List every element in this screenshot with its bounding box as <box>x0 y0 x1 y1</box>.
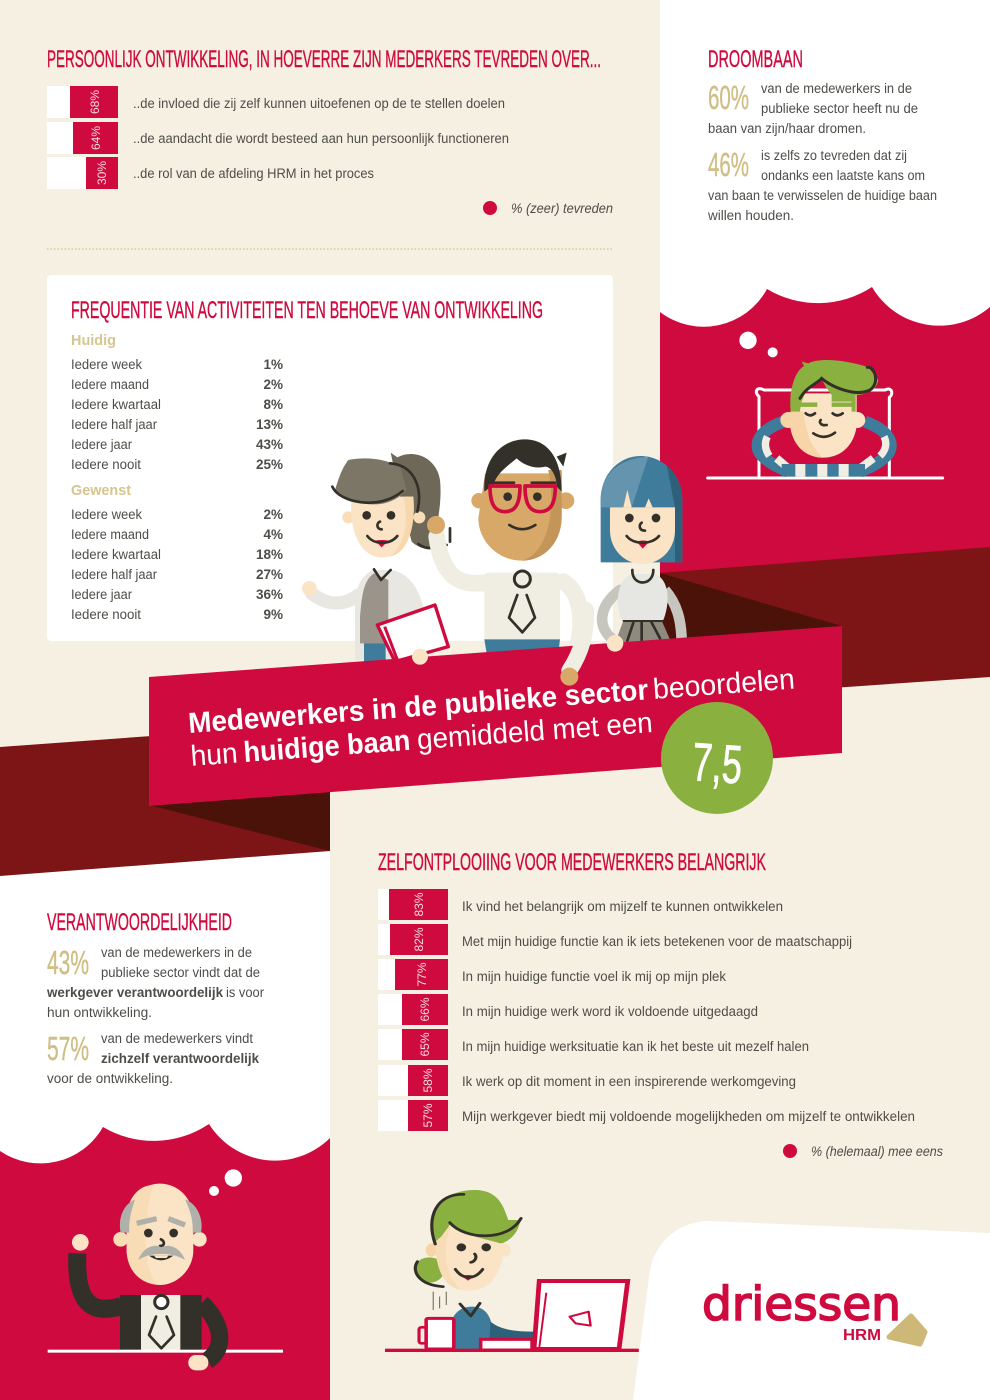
banner text: huidige baan <box>242 725 411 769</box>
panel: frequentie table <box>47 275 613 641</box>
stat: 43 percent: 43% <box>47 944 89 981</box>
legend label: % (helemaal) mee eens <box>811 1144 943 1159</box>
bar: 77 percent <box>378 959 448 990</box>
label: aandacht: ..de aandacht die wordt besteed aan hun persoonlijk functioneren <box>133 131 509 146</box>
label: invloed: ..de invloed die zij zelf kunnen uitoefenen op de te stellen doelen <box>133 96 505 111</box>
stat: 46 percent: 46% <box>708 146 749 183</box>
subheading: huidig: Huidig <box>71 332 116 349</box>
text block: verantwoordelijkheid 2: zichzelf verantwoordelijk <box>101 1051 259 1066</box>
bar: 68 percent <box>47 86 118 118</box>
text block: verantwoordelijkheid 2: van de medewerkers vindt <box>101 1031 253 1046</box>
table: huidig: Iedere jaar <box>71 437 132 452</box>
table: huidig: Iedere kwartaal <box>71 397 161 412</box>
table: huidig: Iedere nooit <box>71 457 141 472</box>
table: gewenst: Iedere jaar <box>71 587 132 602</box>
text block: droombaan 2: ondanks een laatste kans om <box>761 168 925 183</box>
table: huidig <box>71 357 283 472</box>
section: zelfontplooiing <box>378 849 943 1159</box>
text block: verantwoordelijkheid 1: werkgever verantwoordelijk <box>46 985 223 1000</box>
illustration: dreaming man <box>708 332 943 478</box>
bar: 66 percent: 66% <box>418 997 432 1022</box>
text block: droombaan 1: baan van zijn/haar dromen. <box>708 121 866 136</box>
bar: 58 percent <box>378 1065 448 1096</box>
subheading: gewenst: Gewenst <box>71 482 131 499</box>
bar: 30 percent: 30% <box>95 161 109 185</box>
text block: verantwoordelijkheid 2 <box>47 1031 259 1086</box>
logo: driessen HRM: driessen <box>702 1277 901 1331</box>
table: gewenst <box>71 507 283 622</box>
table: gewenst: Iedere nooit <box>71 607 141 622</box>
heading: droombaan: DROOMBAAN <box>708 46 803 73</box>
illustration: older man with moustache <box>48 1169 283 1370</box>
text block: droombaan 2: is zelfs zo tevreden dat zij <box>761 148 907 163</box>
section: persoonlijk ontwikkeling <box>47 46 613 216</box>
panel: verantwoordelijkheid background <box>0 851 330 1400</box>
labels: zelfontplooiing statements: In mijn huidige functie voel ik mij op mijn plek <box>462 969 726 984</box>
character: man with red glasses <box>427 439 581 670</box>
legend label: % (zeer) tevreden <box>511 201 613 216</box>
labels: zelfontplooiing statements <box>462 899 915 1124</box>
body and suit <box>48 1234 283 1370</box>
bar: 65 percent <box>378 1029 448 1060</box>
table: huidig: 43% <box>256 437 283 452</box>
section: verantwoordelijkheid <box>46 909 264 1086</box>
bar: 66 percent <box>378 994 448 1025</box>
table: gewenst: 36% <box>256 587 283 602</box>
table: gewenst: Iedere week <box>71 507 142 522</box>
person <box>414 1190 534 1350</box>
bar: 30 percent <box>47 157 118 189</box>
panel: droombaan text <box>707 46 937 223</box>
text block: verantwoordelijkheid 1: publieke sector vindt dat de <box>101 965 260 980</box>
text block: droombaan 1: publieke sector heeft nu de <box>761 101 918 116</box>
heading: verantwoordelijkheid: VERANTWOORDELIJKHEID <box>47 909 232 936</box>
head <box>113 1184 207 1285</box>
banner text <box>187 664 798 773</box>
text block: droombaan 1 <box>708 81 918 136</box>
panel: bottom right logo background <box>633 1221 990 1400</box>
table: gewenst: 9% <box>263 607 283 622</box>
table: gewenst: Iedere kwartaal <box>71 547 161 562</box>
legend dot <box>483 201 497 215</box>
text block: droombaan 2: willen houden. <box>707 208 794 223</box>
ribbon: maroon band left <box>0 723 330 876</box>
bar: 83 percent: 83% <box>412 892 426 917</box>
table: huidig: 13% <box>256 417 283 432</box>
banner text: beoordelen <box>652 664 796 706</box>
legend dot <box>783 1144 797 1158</box>
labels: zelfontplooiing statements: Ik vind het belangrijk om mijzelf te kunnen ontwikkelen <box>462 899 783 914</box>
illustration: woman at laptop <box>385 1190 639 1352</box>
text block: droombaan 2: van baan te verwisselen de huidige baan <box>708 188 937 203</box>
text block: droombaan 2 <box>707 148 937 223</box>
text block: verantwoordelijkheid 2: voor de ontwikkeling. <box>47 1071 173 1086</box>
bar: 64 percent: 64% <box>89 126 103 150</box>
banner text: Medewerkers in de publieke sector <box>187 674 649 740</box>
bar: 65 percent: 65% <box>418 1032 432 1057</box>
labels: zelfontplooiing statements: In mijn huidige werk word ik voldoende uitgedaagd <box>462 1004 758 1019</box>
table: gewenst: 2% <box>263 507 283 522</box>
thought bubbles <box>739 332 778 357</box>
table: huidig: 1% <box>263 357 283 372</box>
label: rol HRM: ..de rol van de afdeling HRM in het proces <box>133 166 374 181</box>
bar: 57 percent <box>378 1100 448 1131</box>
bar: 82 percent: 82% <box>412 927 426 952</box>
laptop <box>385 1281 639 1352</box>
coffee mug <box>419 1292 454 1349</box>
score badge 7,5: 7,5 <box>690 732 744 795</box>
bar: 82 percent <box>378 924 448 955</box>
text block: verantwoordelijkheid 1: is voor <box>226 985 264 1000</box>
stat: 57 percent: 57% <box>47 1030 89 1067</box>
table: gewenst: 18% <box>256 547 283 562</box>
pillow and desk <box>708 389 943 478</box>
bar: 58 percent: 58% <box>421 1068 435 1093</box>
hand and sleeve over banner <box>412 610 623 686</box>
thought bubbles <box>209 1169 242 1196</box>
panel: droombaan background <box>660 0 990 630</box>
text block: verantwoordelijkheid 1: hun ontwikkeling. <box>47 1005 152 1020</box>
text block: droombaan 1: van de medewerkers in de <box>761 81 912 96</box>
score badge 7,5 <box>661 702 773 814</box>
stat: 60 percent: 60% <box>708 79 749 116</box>
banner text: hun <box>190 738 239 773</box>
bar: 57 percent: 57% <box>421 1103 435 1128</box>
banner text: gemiddeld met een <box>416 707 654 756</box>
logo: driessen HRM: HRM <box>843 1327 881 1344</box>
bar: 64 percent <box>47 122 118 154</box>
table: huidig: Iedere week <box>71 357 142 372</box>
head <box>780 360 878 458</box>
banner: main statement <box>149 610 842 814</box>
labels: zelfontplooiing statements: In mijn huidige werksituatie kan ik het beste uit mezelf halen <box>462 1039 809 1054</box>
table: huidig: 25% <box>256 457 283 472</box>
table: gewenst: Iedere maand <box>71 527 149 542</box>
table: huidig: 8% <box>263 397 283 412</box>
text block: verantwoordelijkheid 1: van de medewerkers in de <box>101 945 252 960</box>
table: huidig: Iedere maand <box>71 377 149 392</box>
bar: 68 percent: 68% <box>88 90 102 114</box>
illustration: three colleagues <box>302 439 682 670</box>
labels: zelfontplooiing statements: Met mijn huidige functie kan ik iets betekenen voor de maatschappij <box>462 934 852 949</box>
table: gewenst: Iedere half jaar <box>71 567 157 582</box>
table: huidig: Iedere half jaar <box>71 417 157 432</box>
labels: zelfontplooiing statements: Ik werk op dit moment in een inspirerende werkomgeving <box>462 1074 796 1089</box>
text block: verantwoordelijkheid 1 <box>46 945 264 1020</box>
labels: zelfontplooiing statements: Mijn werkgever biedt mij voldoende mogelijkheden om mijzelf te ontwikkelen <box>462 1109 915 1124</box>
bar: 83 percent <box>378 889 448 920</box>
heading: frequentie: FREQUENTIE VAN ACTIVITEITEN TEN BEHOEVE VAN ONTWIKKELING <box>71 297 543 324</box>
character: woman with ponytail <box>302 453 450 663</box>
bar: 77 percent: 77% <box>415 962 429 987</box>
table: gewenst: 27% <box>256 567 283 582</box>
table: huidig: 2% <box>263 377 283 392</box>
table: gewenst: 4% <box>263 527 283 542</box>
ribbon: maroon band right <box>660 547 990 700</box>
ribbon: fold shadow left <box>149 790 330 851</box>
ribbon: fold shadow right <box>660 573 842 650</box>
arms and striped shirt <box>758 422 891 477</box>
character: woman with blue hair <box>601 456 682 643</box>
